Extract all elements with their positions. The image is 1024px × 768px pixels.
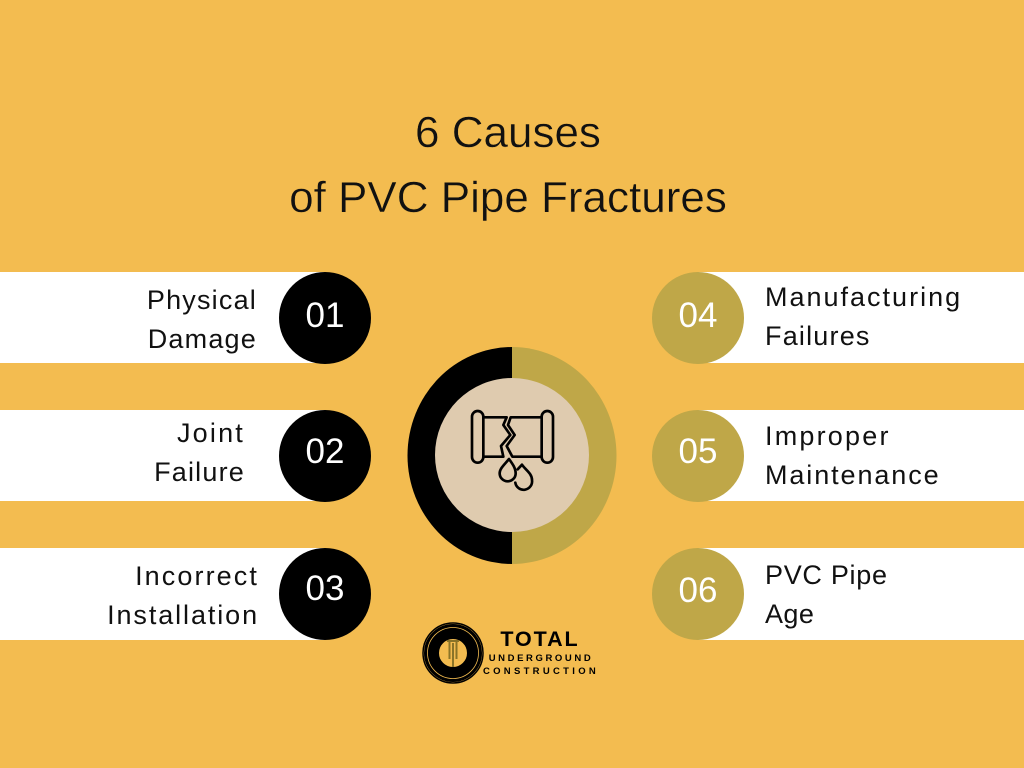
item 03: Incorrect Installation	[0, 548, 371, 640]
item 02: Joint Failure: 02	[306, 432, 344, 471]
item 06: PVC Pipe Age: PVC Pipe	[765, 560, 888, 590]
logo wordmark: CONSTRUCTION	[483, 666, 599, 677]
item 03: Incorrect Installation: Incorrect	[135, 561, 259, 591]
item 04: Manufacturing Failures: Manufacturing	[765, 282, 962, 312]
title	[289, 108, 727, 222]
item 01: Physical Damage: Damage	[148, 324, 257, 354]
logo wordmark	[483, 627, 599, 677]
logo: Total Underground Construction	[422, 622, 599, 684]
item 02: Joint Failure: Joint	[177, 418, 245, 448]
item 01: Physical Damage: Physical	[147, 285, 257, 315]
title: 6 Causes	[415, 108, 601, 157]
item 04: Manufacturing Failures: 04	[679, 296, 717, 335]
logo wordmark: TOTAL	[500, 627, 580, 651]
item 01: Physical Damage	[0, 272, 371, 364]
logo emblem	[422, 622, 484, 684]
icon: fractured pipe with drops	[472, 411, 553, 490]
item 05: Improper Maintenance: Maintenance	[765, 460, 941, 490]
item 03: Incorrect Installation: 03	[306, 569, 344, 608]
item 05: Improper Maintenance: 05	[679, 432, 717, 471]
item 04: Manufacturing Failures	[652, 272, 1024, 364]
item 05: Improper Maintenance: Improper	[765, 421, 891, 451]
item 02: Joint Failure	[0, 410, 371, 502]
item 06: PVC Pipe Age	[652, 548, 1024, 640]
title: of PVC Pipe Fractures	[289, 173, 727, 222]
item 01: Physical Damage: 01	[306, 296, 344, 335]
item 04: Manufacturing Failures: Failures	[765, 321, 871, 351]
center graphic: split ring with pipe icon	[408, 347, 616, 564]
item 03: Incorrect Installation: Installation	[107, 600, 259, 630]
item 06: PVC Pipe Age: 06	[679, 571, 717, 610]
item 02: Joint Failure: Failure	[154, 457, 245, 487]
item 05: Improper Maintenance	[652, 410, 1024, 502]
item 06: PVC Pipe Age: Age	[765, 599, 814, 629]
logo wordmark: UNDERGROUND	[489, 653, 593, 664]
